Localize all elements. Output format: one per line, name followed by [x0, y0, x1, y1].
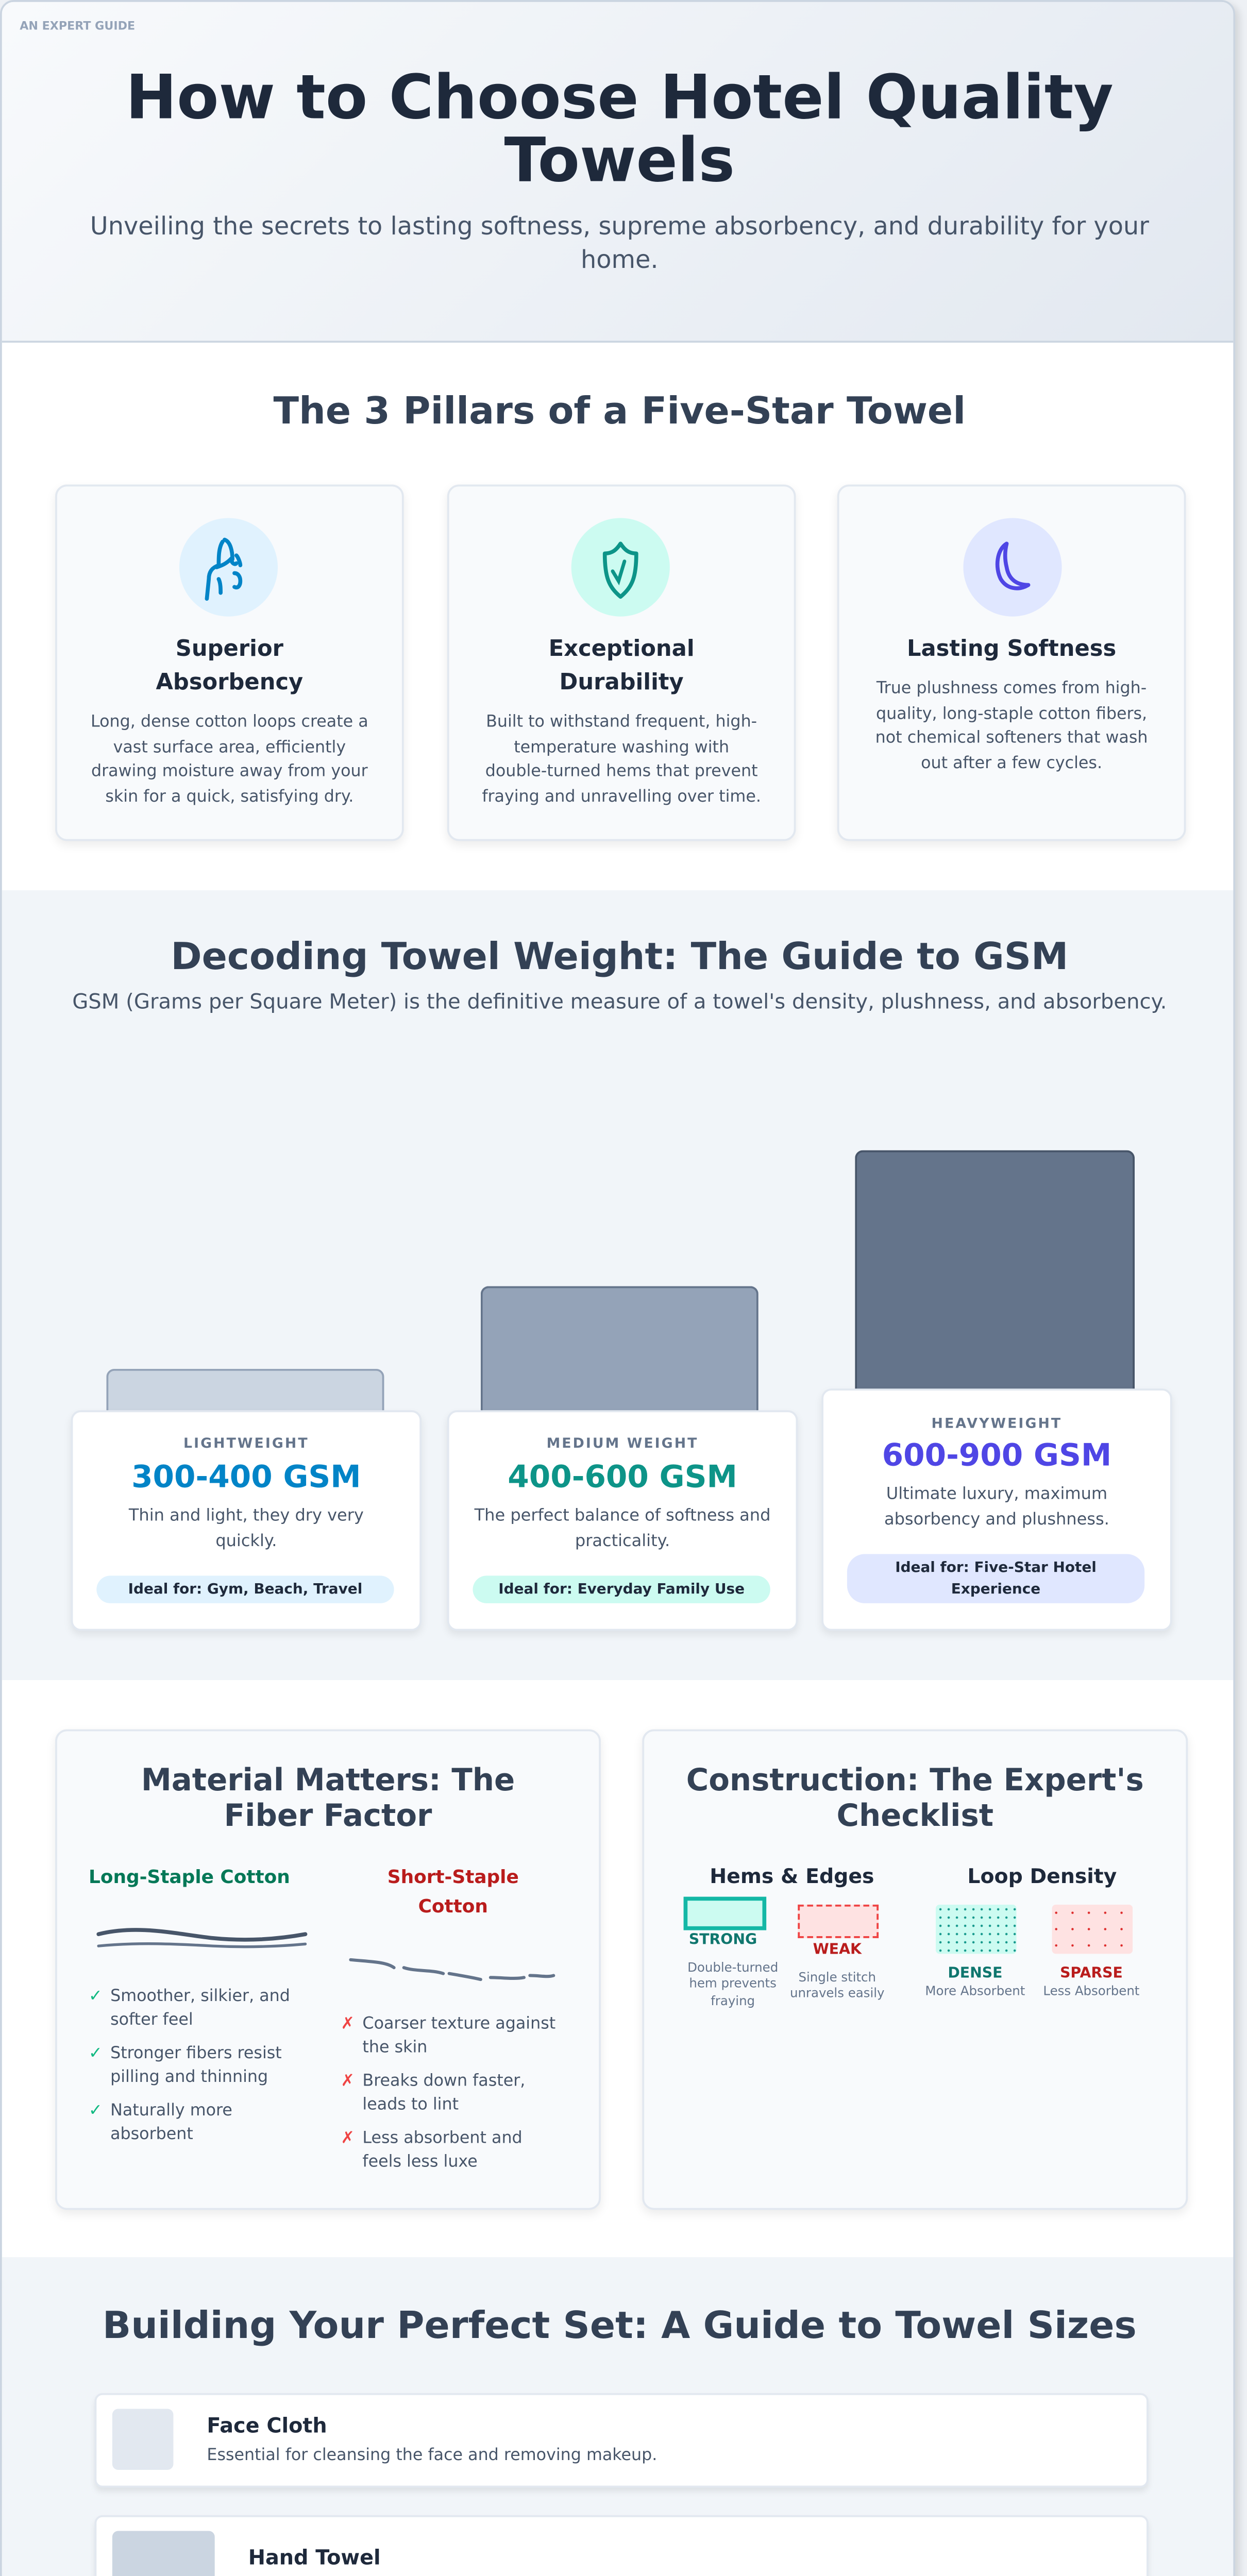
- list: long-staple benefits: softer feel: [110, 2009, 193, 2029]
- text: absorbency: drawing moisture away from your: [91, 760, 368, 780]
- heading: construction: Construction: The Expert's: [686, 1763, 1144, 1798]
- subhead: hems: Hems & Edges: [710, 1865, 874, 1889]
- heading: material: [141, 1763, 515, 1834]
- title: absorbency: [156, 636, 303, 694]
- text: durability: Built to withstand frequent, high-: [486, 711, 757, 731]
- eyebrow label: AN EXPERT GUIDE: [20, 22, 135, 33]
- section: sizes: [2, 2257, 1237, 2576]
- title: hand towel: Hand Towel: [248, 2547, 381, 2570]
- pill: lightweight: Ideal for: Gym, Beach, Travel: [128, 1580, 362, 1597]
- value: 400-600: 400-600 GSM: [508, 1460, 737, 1495]
- pill: heavy: Ideal for: Five-Star Hotel: [895, 1558, 1097, 1575]
- title: [126, 63, 1114, 196]
- caption: strong: Double-turned: [687, 1960, 778, 1975]
- text: lightweight: quickly.: [215, 1530, 277, 1549]
- text: lightweight: Thin and light, they dry very: [129, 1505, 364, 1524]
- pill: medium: Ideal for: Everyday Family Use: [498, 1580, 745, 1597]
- text: absorbency: [91, 711, 368, 805]
- header: [2, 2, 1237, 343]
- heading: sizes: Building Your Perfect Set: A Guide to Towel Sizes: [103, 2304, 1137, 2348]
- list: long-staple benefits: Stronger fibers resist: [110, 2042, 282, 2062]
- bar: lightweight: [106, 1369, 384, 1420]
- panel: material: [55, 1730, 601, 2210]
- list: short-staple drawbacks: ✗: [341, 2013, 355, 2032]
- text: softness: True plushness comes from high-: [877, 677, 1147, 697]
- list: long-staple benefits: [89, 1986, 290, 2143]
- title: Towels: [504, 125, 735, 196]
- caption: strong: hem prevents: [689, 1976, 777, 1992]
- icon: weak hem: [798, 1905, 879, 1938]
- text: durability: double-turned hems that prevent: [485, 760, 758, 780]
- pill: medium: [473, 1575, 770, 1603]
- icon: shield: [571, 518, 670, 617]
- section: material & construction: [2, 1680, 1237, 2257]
- icon: short fibers: [349, 1958, 555, 1981]
- text: heavy: absorbency and plushness.: [884, 1508, 1109, 1528]
- list: long-staple benefits: Smoother, silkier, and: [110, 1986, 290, 2005]
- bar: heavy: [855, 1150, 1135, 1398]
- list: short-staple drawbacks: Coarser texture against: [362, 2013, 555, 2032]
- text: durability: fraying and unravelling over time.: [482, 785, 761, 805]
- caption: dense: More Absorbent: [925, 1984, 1025, 1999]
- caption: weak: Single stitch: [799, 1970, 876, 1986]
- caption: strong: [673, 1960, 792, 2009]
- card: lightweight: [71, 1410, 422, 1631]
- list: short-staple drawbacks: Less absorbent and: [362, 2127, 523, 2147]
- pill: lightweight: [96, 1575, 394, 1603]
- swatch: face cloth: [112, 2409, 173, 2470]
- heading: material: Fiber Factor: [224, 1798, 432, 1834]
- list: short-staple drawbacks: the skin: [362, 2037, 427, 2056]
- label: medium: MEDIUM WEIGHT: [547, 1436, 698, 1452]
- subtitle: GSM: GSM (Grams per Square Meter) is the definitive measure of a towel's density, plushness, and absorbency.: [72, 991, 1167, 1014]
- label: weak: WEAK: [813, 1940, 862, 1958]
- title: durability: Durability: [560, 669, 684, 694]
- icon: absorbency: [179, 518, 278, 617]
- text: medium: The perfect balance of softness and: [475, 1505, 770, 1524]
- heading: construction: Checklist: [836, 1798, 993, 1834]
- text: absorbency: vast surface area, efficiently: [113, 736, 346, 755]
- text: durability: temperature washing with: [514, 736, 729, 755]
- text: hand towel: [248, 2574, 659, 2576]
- text: medium: [474, 1505, 770, 1550]
- label: strong: STRONG: [689, 1930, 757, 1948]
- title: absorbency: Absorbency: [156, 669, 303, 694]
- pill: heavy: Experience: [951, 1579, 1040, 1597]
- text: absorbency: Long, dense cotton loops create a: [91, 711, 368, 731]
- caption: weak: [778, 1970, 896, 2002]
- list: long-staple benefits: Naturally more: [110, 2099, 232, 2120]
- list: short-staple drawbacks: leads to lint: [362, 2094, 459, 2113]
- text: lightweight: [129, 1505, 364, 1550]
- subhead: short-staple: [387, 1867, 519, 1919]
- list: long-staple benefits: absorbent: [110, 2123, 193, 2143]
- caption: strong: fraying: [711, 1992, 755, 2008]
- icon: strong hem: [684, 1897, 766, 1930]
- caption: sparse: Less Absorbent: [1043, 1984, 1139, 1999]
- label: sparse: SPARSE: [1060, 1964, 1123, 1981]
- card: softness: [837, 484, 1186, 841]
- text: softness: not chemical softeners that wash: [875, 727, 1148, 747]
- text: softness: [875, 677, 1148, 772]
- list: short-staple drawbacks: ✗: [341, 2070, 355, 2090]
- label: lightweight: LIGHTWEIGHT: [183, 1436, 309, 1452]
- list: short-staple drawbacks: Breaks down faster,: [362, 2070, 525, 2090]
- icon: dense loops: [936, 1905, 1017, 1954]
- icon: sparse loops: [1052, 1905, 1133, 1954]
- bar: medium: [481, 1286, 759, 1420]
- text: absorbency: skin for a quick, satisfying dry.: [105, 785, 353, 805]
- title: durability: Exceptional: [549, 636, 695, 662]
- panel: construction: [642, 1730, 1188, 2210]
- section: GSM: [2, 890, 1237, 1680]
- text: face cloth: Essential for cleansing the face and removing makeup.: [207, 2444, 657, 2464]
- list: short-staple drawbacks: feels less luxe: [362, 2151, 478, 2171]
- heading: construction: [686, 1763, 1144, 1834]
- icon: long fibers: [96, 1928, 307, 1948]
- title: softness: Lasting Softness: [907, 636, 1116, 662]
- list: long-staple benefits: ✓: [89, 1986, 103, 2005]
- value: 600-900: 600-900 GSM: [882, 1438, 1111, 1473]
- row: hand towel: [95, 2515, 1149, 2576]
- heading: material: Material Matters: The: [141, 1763, 515, 1798]
- card: heavy: [821, 1388, 1172, 1631]
- section: pillars: [2, 343, 1237, 890]
- subhead: short-staple: Short-Staple: [387, 1867, 519, 1889]
- subtitle: [90, 211, 1149, 274]
- card: absorbency: [55, 484, 404, 841]
- list: short-staple drawbacks: ✗: [341, 2127, 355, 2147]
- list: long-staple benefits: ✓: [89, 2099, 103, 2120]
- icon: moon: [963, 518, 1062, 617]
- subhead: short-staple: Cotton: [418, 1897, 488, 1919]
- list: short-staple drawbacks: [341, 2013, 555, 2171]
- text: durability: [482, 711, 761, 805]
- caption: weak: unravels easily: [790, 1986, 885, 2002]
- heading: GSM: Decoding Towel Weight: The Guide to GSM: [171, 936, 1068, 979]
- card: medium: [447, 1410, 798, 1631]
- label: heavy: HEAVYWEIGHT: [932, 1416, 1062, 1432]
- pill: heavy: [847, 1554, 1144, 1603]
- row: face cloth: [95, 2393, 1149, 2487]
- swatch: hand towel: [112, 2531, 215, 2576]
- subtitle: Unveiling the secrets to lasting softness, supreme absorbency, and durability for your: [90, 211, 1149, 240]
- title: How to Choose Hotel Quality: [126, 63, 1114, 134]
- label: dense: DENSE: [948, 1964, 1002, 1981]
- subtitle: home.: [581, 244, 659, 274]
- text: medium: practicality.: [575, 1530, 670, 1549]
- list: long-staple benefits: ✓: [89, 2042, 103, 2062]
- value: 300-400: 300-400 GSM: [131, 1460, 361, 1495]
- text: softness: quality, long-staple cotton fibers,: [876, 702, 1147, 722]
- subhead: loop density: Loop Density: [967, 1865, 1117, 1889]
- title: absorbency: Superior: [176, 636, 283, 662]
- card: durability: [447, 484, 796, 841]
- title: durability: [549, 636, 695, 694]
- text: heavy: [884, 1483, 1109, 1528]
- heading: pillars: The 3 Pillars of a Five-Star Towel: [274, 390, 966, 433]
- title: face cloth: Face Cloth: [207, 2415, 327, 2438]
- text: heavy: Ultimate luxury, maximum: [886, 1483, 1107, 1503]
- subhead: long-staple: Long-Staple Cotton: [89, 1867, 290, 1889]
- text: softness: out after a few cycles.: [921, 751, 1102, 771]
- list: long-staple benefits: pilling and thinning: [110, 2066, 268, 2086]
